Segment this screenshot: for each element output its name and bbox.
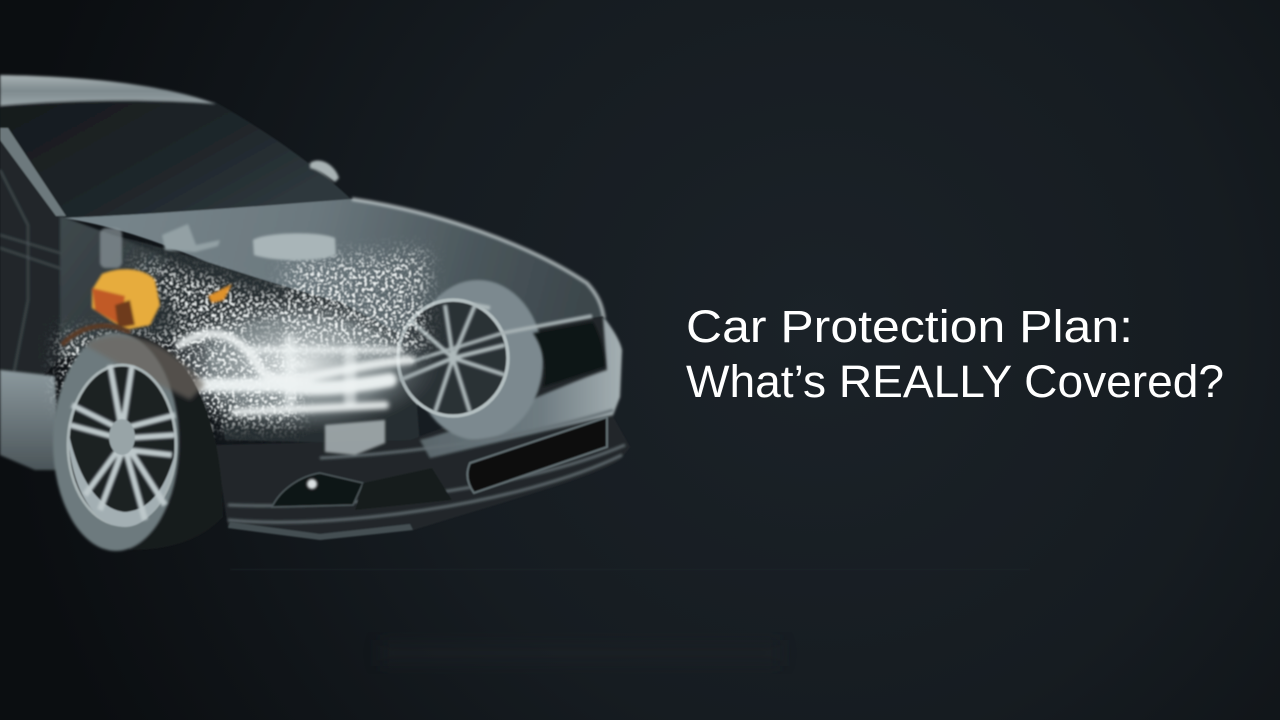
- door seam lines: [0, 170, 95, 372]
- hood-side component: [162, 224, 220, 252]
- floor reflection: [380, 640, 780, 666]
- title: Car Protection Plan:: [686, 301, 1133, 352]
- fog lamp: [307, 479, 317, 489]
- title: [686, 301, 1224, 407]
- fog lamp intake: [272, 473, 363, 507]
- side sill: [0, 370, 60, 470]
- hood rim highlight: [352, 199, 604, 318]
- bumper lines: [228, 410, 625, 522]
- windshield: [0, 100, 352, 218]
- engine bay: [112, 235, 420, 445]
- front wheel: [53, 333, 223, 551]
- illustration: transparent x-ray car: [0, 75, 630, 551]
- wing mirror: [310, 161, 339, 182]
- title: What’s REALLY Covered?: [686, 356, 1224, 407]
- wheel hub: [109, 419, 135, 455]
- lower grille centre: [355, 468, 452, 510]
- tyre rear shadow: [120, 333, 223, 550]
- suspension tower: [100, 228, 122, 268]
- right nose panel: [420, 316, 622, 458]
- orange spark: [208, 284, 232, 303]
- roof: [0, 75, 216, 106]
- battery block: [325, 420, 385, 455]
- grille opening: [533, 322, 605, 387]
- upper tyre tint: [85, 335, 205, 400]
- A-pillar: [0, 128, 66, 216]
- orange component: [92, 269, 160, 330]
- engine speckle: [60, 252, 428, 425]
- door and side panels: [0, 130, 150, 378]
- tyre face: [53, 333, 179, 551]
- engine glow: [160, 295, 440, 435]
- grille top bar: [410, 316, 592, 362]
- rear wheel disc: [398, 280, 543, 440]
- hood: [62, 199, 603, 362]
- rim lower lip: [68, 430, 176, 527]
- rim opening: [68, 365, 176, 525]
- washer reservoir: [253, 233, 336, 260]
- bumper lip: [228, 522, 413, 540]
- brown wheel arch: [62, 326, 130, 345]
- front fascia and bumper body: [216, 316, 630, 540]
- engine pipes and blocks: [180, 334, 410, 412]
- lower intake: [467, 417, 607, 493]
- floor reflection line: [230, 569, 1030, 570]
- wheel spokes: [70, 365, 175, 520]
- wing panel: [60, 216, 170, 360]
